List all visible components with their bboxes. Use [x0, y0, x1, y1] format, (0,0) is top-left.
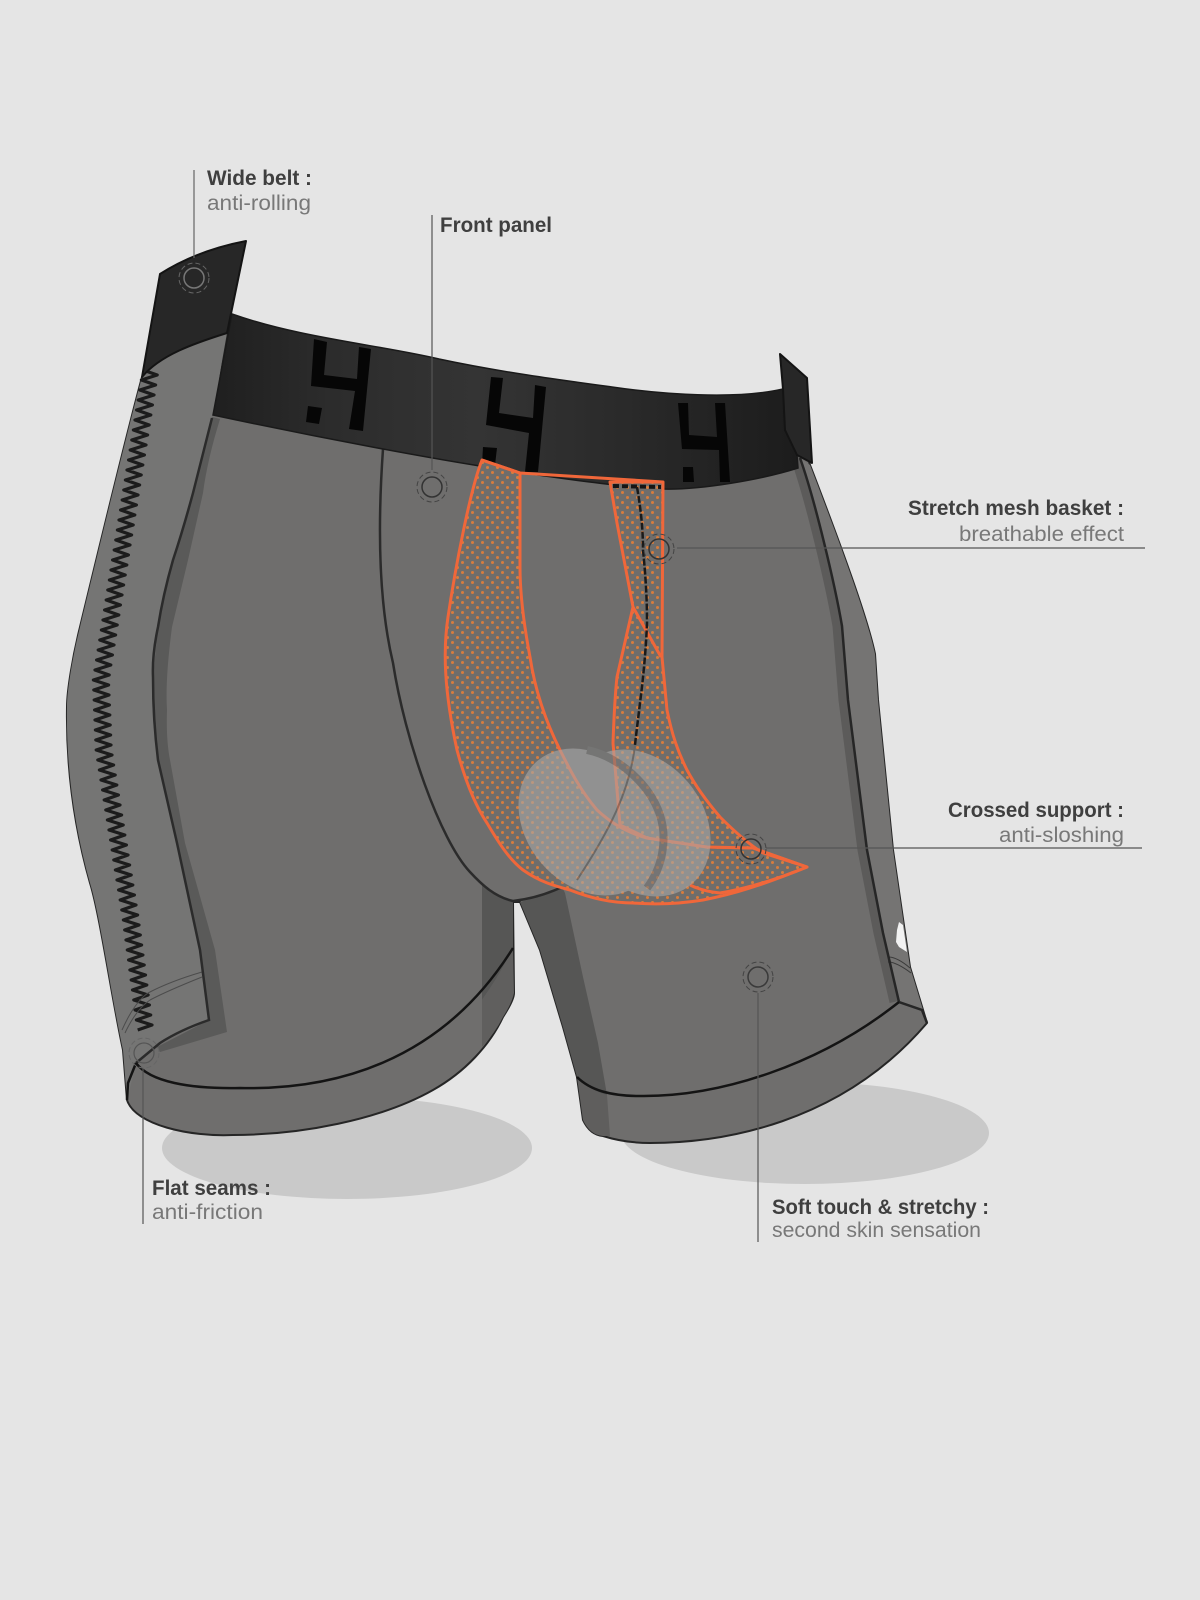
label: second skin sensation: [772, 1219, 981, 1242]
waistband logo 1: [306, 339, 371, 431]
shading: right leg inner strip: [520, 887, 607, 1095]
callout: flat seams: [129, 1038, 271, 1224]
mesh band: inner crossed support: [610, 482, 807, 867]
flat seam zigzag: [93, 370, 157, 1030]
waistband logo 3: [678, 403, 730, 482]
label: [772, 1196, 989, 1242]
label: Front panel: [440, 214, 552, 237]
leader line: [431, 215, 433, 470]
shading: left leg inner strip: [482, 885, 513, 1000]
belt showing through mesh: [613, 486, 661, 487]
leader line: [757, 993, 759, 1242]
left side panel fill: [67, 333, 227, 1100]
callout: wide belt: [179, 167, 312, 293]
right cuff seam: [577, 1002, 899, 1096]
marker: [743, 962, 773, 992]
dashed centre seam: [635, 487, 647, 745]
label: Wide belt :: [207, 167, 312, 190]
label: [948, 799, 1124, 847]
anatomy overlay: [489, 720, 740, 925]
garment body silhouette: [67, 333, 927, 1143]
left side panel seam: [136, 418, 212, 1063]
side label tag: [896, 922, 907, 952]
label: anti-sloshing: [999, 824, 1124, 847]
leader line: [142, 1068, 144, 1224]
marker: [179, 263, 209, 293]
left cuff seam: [127, 948, 513, 1100]
cuff stitching: right leg: [888, 957, 911, 973]
label: Flat seams :: [152, 1177, 271, 1200]
boxer brief illustration: [67, 241, 927, 1143]
left ball: [489, 720, 689, 924]
callout: crossed support: [736, 799, 1142, 864]
front panel seam: [380, 449, 562, 901]
waistband: [213, 314, 798, 489]
shading: left side panel strip: [152, 417, 227, 1052]
basket top edge: [482, 460, 663, 482]
label: anti-friction: [152, 1201, 263, 1224]
callout: stretch mesh basket: [644, 497, 1145, 564]
label: [908, 497, 1124, 546]
label: anti-rolling: [207, 192, 311, 215]
crossing strand: [633, 607, 807, 893]
shading: left cuff strip: [482, 948, 514, 1047]
marker: [129, 1038, 159, 1068]
right side panel fill: [800, 458, 927, 1023]
right ball: [540, 721, 740, 925]
mesh band: outer crossed support: [445, 460, 807, 904]
right side panel seam: [800, 458, 927, 1023]
callout: front panel: [417, 214, 552, 502]
label: Crossed support :: [948, 799, 1124, 822]
leader line: [677, 547, 1145, 549]
shading: right cuff strip: [577, 1077, 610, 1136]
ground shadow: right leg: [621, 1082, 989, 1184]
label: Stretch mesh basket :: [908, 497, 1124, 520]
ground shadow: left leg: [162, 1097, 532, 1199]
left waistband tab: [142, 241, 246, 377]
right waistband tab: [780, 354, 812, 463]
waistband logo 2: [482, 377, 546, 472]
shading: right side panel strip: [795, 458, 894, 1002]
label: Soft touch & stretchy :: [772, 1196, 989, 1219]
stretch mesh basket: [445, 460, 807, 904]
marker: [736, 834, 766, 864]
callout: soft touch and stretchy: [743, 962, 989, 1242]
leader line: [193, 170, 195, 258]
marker: [417, 472, 447, 502]
marker: [644, 534, 674, 564]
label: [152, 1177, 271, 1224]
label: breathable effect: [959, 523, 1124, 546]
leader line: [766, 847, 1142, 849]
ball edge shading: [587, 750, 664, 888]
label: [207, 167, 312, 215]
cuff stitching: left leg: [122, 972, 202, 1033]
seam seen through overlay: [577, 745, 635, 880]
